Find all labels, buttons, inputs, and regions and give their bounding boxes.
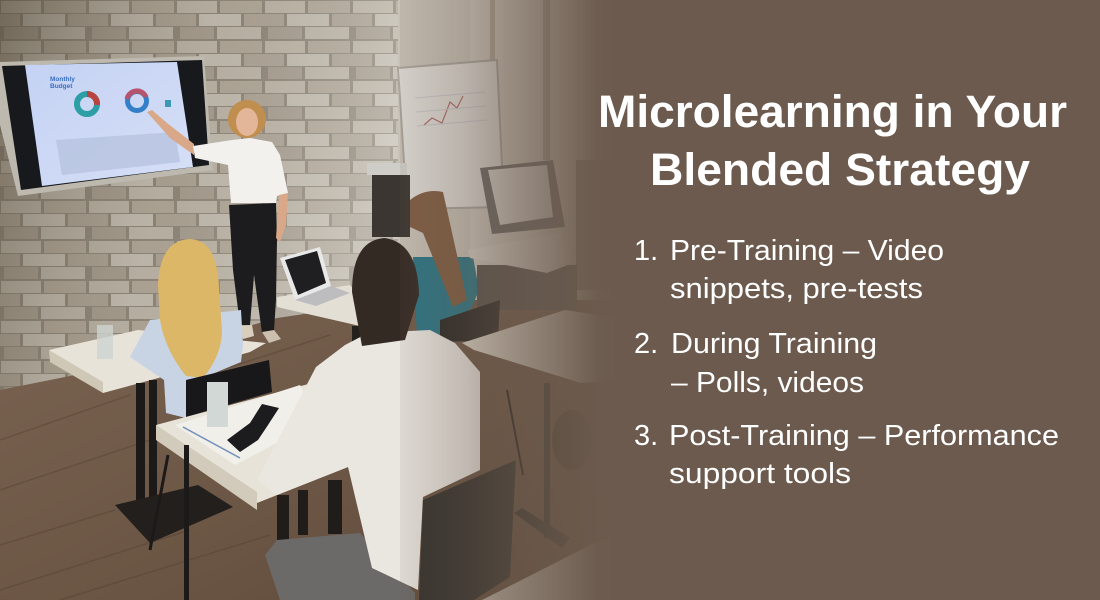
bottom right desk — [482, 525, 630, 600]
whiteboard — [398, 60, 504, 209]
chart donuts — [77, 91, 171, 114]
list item 3: Post-Training – Performance — [669, 420, 1059, 452]
light wall and window — [398, 0, 630, 320]
right brown panel — [618, 0, 1100, 600]
wall display screen — [0, 56, 213, 196]
list item 1: snippets, pre-tests — [670, 273, 923, 305]
right desk — [462, 310, 630, 548]
list item 2 — [634, 328, 877, 399]
left desk — [49, 325, 266, 543]
list item 1: 1. — [634, 235, 658, 267]
brick wall — [0, 0, 400, 400]
chart title: Monthly — [50, 76, 75, 83]
classroom photo — [0, 0, 630, 600]
front chair — [419, 460, 516, 600]
brown fade overlay — [400, 0, 620, 600]
front desk — [150, 382, 348, 600]
rear desk with laptop — [277, 247, 362, 350]
list item 2: – Polls, videos — [671, 367, 864, 399]
wall display screen: Budget — [50, 83, 73, 90]
list item 2: 2. — [634, 328, 658, 360]
blonde attendee — [130, 239, 243, 418]
list item 1 — [634, 235, 944, 305]
list item 3: 3. — [634, 420, 658, 452]
title: Blended Strategy — [650, 144, 1030, 195]
rear chair — [440, 300, 500, 342]
list item 3 — [634, 420, 1059, 490]
left chair — [186, 360, 272, 417]
table — [56, 132, 180, 175]
list item 2: During Training — [671, 328, 877, 360]
title — [598, 86, 1067, 195]
list item 3: support tools — [669, 458, 851, 490]
woman in teal — [410, 191, 479, 337]
list item 1: Pre-Training – Video — [670, 235, 944, 267]
title: Microlearning in Your — [598, 86, 1067, 137]
right rear desk and monitor — [468, 160, 616, 310]
presenter — [147, 100, 288, 343]
floor — [0, 300, 630, 600]
cabinet — [367, 163, 410, 237]
man in white shirt — [257, 238, 480, 600]
